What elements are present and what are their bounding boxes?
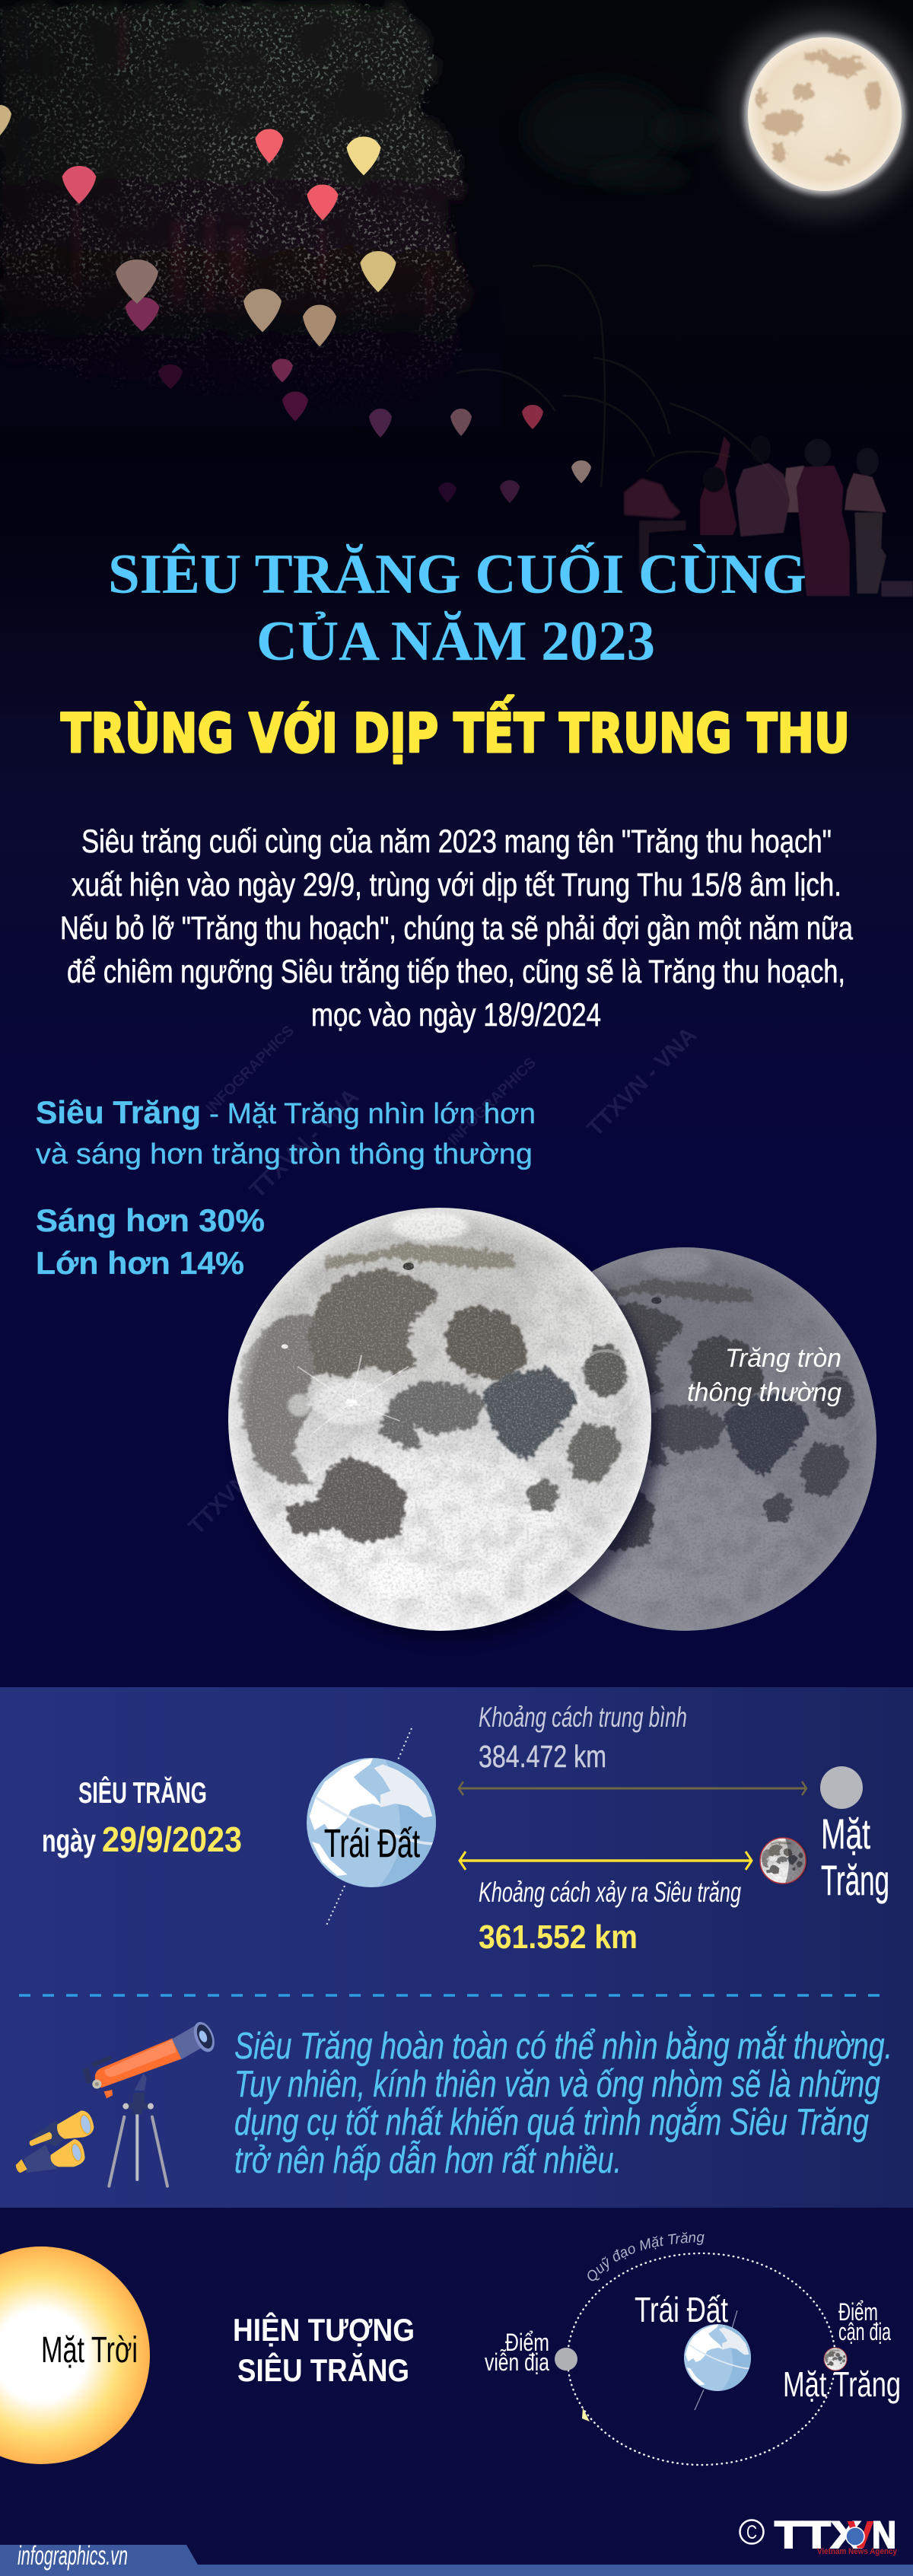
earth small [684, 2322, 757, 2395]
icon: telescope [83, 2019, 218, 2186]
label: moon [821, 1810, 889, 1904]
supermoon [228, 1208, 651, 1631]
heading: phenomenon [233, 2311, 415, 2388]
regular full moon [493, 1247, 876, 1631]
supermoon definition: Siêu Trăng [36, 1094, 201, 1130]
tree canopy [0, 0, 502, 426]
shadow of the supermoon [237, 1219, 660, 1642]
watermarks: TTXVN - VNA [245, 1084, 364, 1203]
sun [0, 2246, 150, 2464]
watermarks [184, 1022, 701, 1540]
supermoon date: 29/9/2023 [102, 1820, 242, 1859]
supermoon statistics [36, 1202, 265, 1281]
label: earth: Trái Đất [324, 1822, 420, 1866]
watermarks: INFOGRAPHICS [203, 1023, 297, 1117]
lanterns [0, 105, 591, 503]
orbit direction arrow [582, 2408, 590, 2422]
title: SIÊU TRĂNG CUỐI CÙNG [108, 542, 806, 606]
moon at supermoon distance [760, 1838, 808, 1883]
supermoon date [42, 1776, 242, 1859]
label: sun: Mặt Trời [41, 2330, 138, 2371]
footer source: infographics.vn [17, 2541, 128, 2571]
logo: TTXVN: C [746, 2522, 757, 2543]
logo: TTXVN: TTX [775, 2514, 861, 2556]
viewing advice [234, 2026, 892, 2181]
heading: phenomenon: HIỆN TƯỢNG [233, 2311, 415, 2348]
label: regular full moon [687, 1344, 841, 1407]
supermoon definition: và sáng hơn trăng tròn thông thường [36, 1138, 533, 1170]
earth axis small [695, 2310, 737, 2410]
supermoon definition [36, 1094, 536, 1170]
label: apogee: Điểm [505, 2329, 549, 2356]
label: apogee: viễn địa [485, 2348, 549, 2376]
label: regular full moon: thông thường [687, 1378, 841, 1407]
logo: TTXVN: Vietnam News Agency [817, 2547, 898, 2556]
title: CỦA NĂM 2023 [256, 610, 655, 673]
panel: distance and viewing [0, 1687, 913, 2208]
supermoon distance: Khoảng cách xảy ra Siêu trăng [479, 1877, 741, 1908]
moon at average distance [820, 1766, 863, 1809]
label: moon: Mặt [821, 1810, 870, 1858]
supermoon distance: 361.552 km [479, 1918, 638, 1956]
watermarks: TTXVN [184, 1469, 254, 1540]
supermoon distance [479, 1877, 741, 1956]
clouds and palm trees [456, 80, 791, 502]
supermoon statistics: Sáng hơn 30% [36, 1202, 265, 1238]
orbit label: Quỹ đạo Mặt Trăng [587, 2232, 705, 2281]
earth axis dots [326, 1728, 412, 1925]
earth [307, 1754, 447, 1895]
label: regular full moon: Trăng tròn [725, 1344, 841, 1373]
supermoon statistics: Lớn hơn 14% [36, 1245, 244, 1281]
label: apogee [485, 2329, 549, 2376]
logo: TTXVN: V [848, 2514, 874, 2556]
moon at perigee [824, 2348, 847, 2371]
watermarks: INFOGRAPHICS [445, 1055, 539, 1149]
intro paragraph: mọc vào ngày 18/9/2024 [311, 997, 601, 1033]
average distance: 384.472 km [479, 1739, 606, 1774]
title [108, 542, 806, 673]
moon orbit [568, 2253, 835, 2465]
supermoon date: SIÊU TRĂNG [78, 1776, 207, 1810]
moon at apogee [555, 2348, 577, 2371]
people watching the moon [624, 435, 913, 597]
moon in sky [722, 11, 913, 217]
label: perigee: Điểm [838, 2298, 878, 2326]
label: earth small: Trái Đất [635, 2290, 728, 2329]
label: perigee [838, 2298, 891, 2345]
watermarks: TTXVN - VNA [583, 1022, 701, 1142]
arrow: average distance [459, 1782, 806, 1795]
footer bar [0, 2545, 913, 2576]
supermoon definition: - Mặt Trăng nhìn lớn hơn [209, 1098, 536, 1130]
intro paragraph [60, 823, 853, 1033]
viewing advice: trở nên hấp dẫn hơn rất nhiều. [234, 2140, 622, 2181]
logo: TTXVN [740, 2514, 898, 2556]
logo: TTXVN: N [872, 2514, 896, 2556]
arrow: supermoon distance [460, 1852, 752, 1870]
average distance: Khoảng cách trung bình [479, 1702, 687, 1733]
panel: supermoon phenomenon [0, 2232, 913, 2576]
heading: phenomenon: SIÊU TRĂNG [237, 2352, 409, 2388]
average distance [479, 1702, 687, 1774]
hero photo: lantern tree, full moon and people [0, 0, 913, 597]
supermoon date: ngày [42, 1823, 96, 1858]
icon: binoculars [16, 2110, 94, 2173]
